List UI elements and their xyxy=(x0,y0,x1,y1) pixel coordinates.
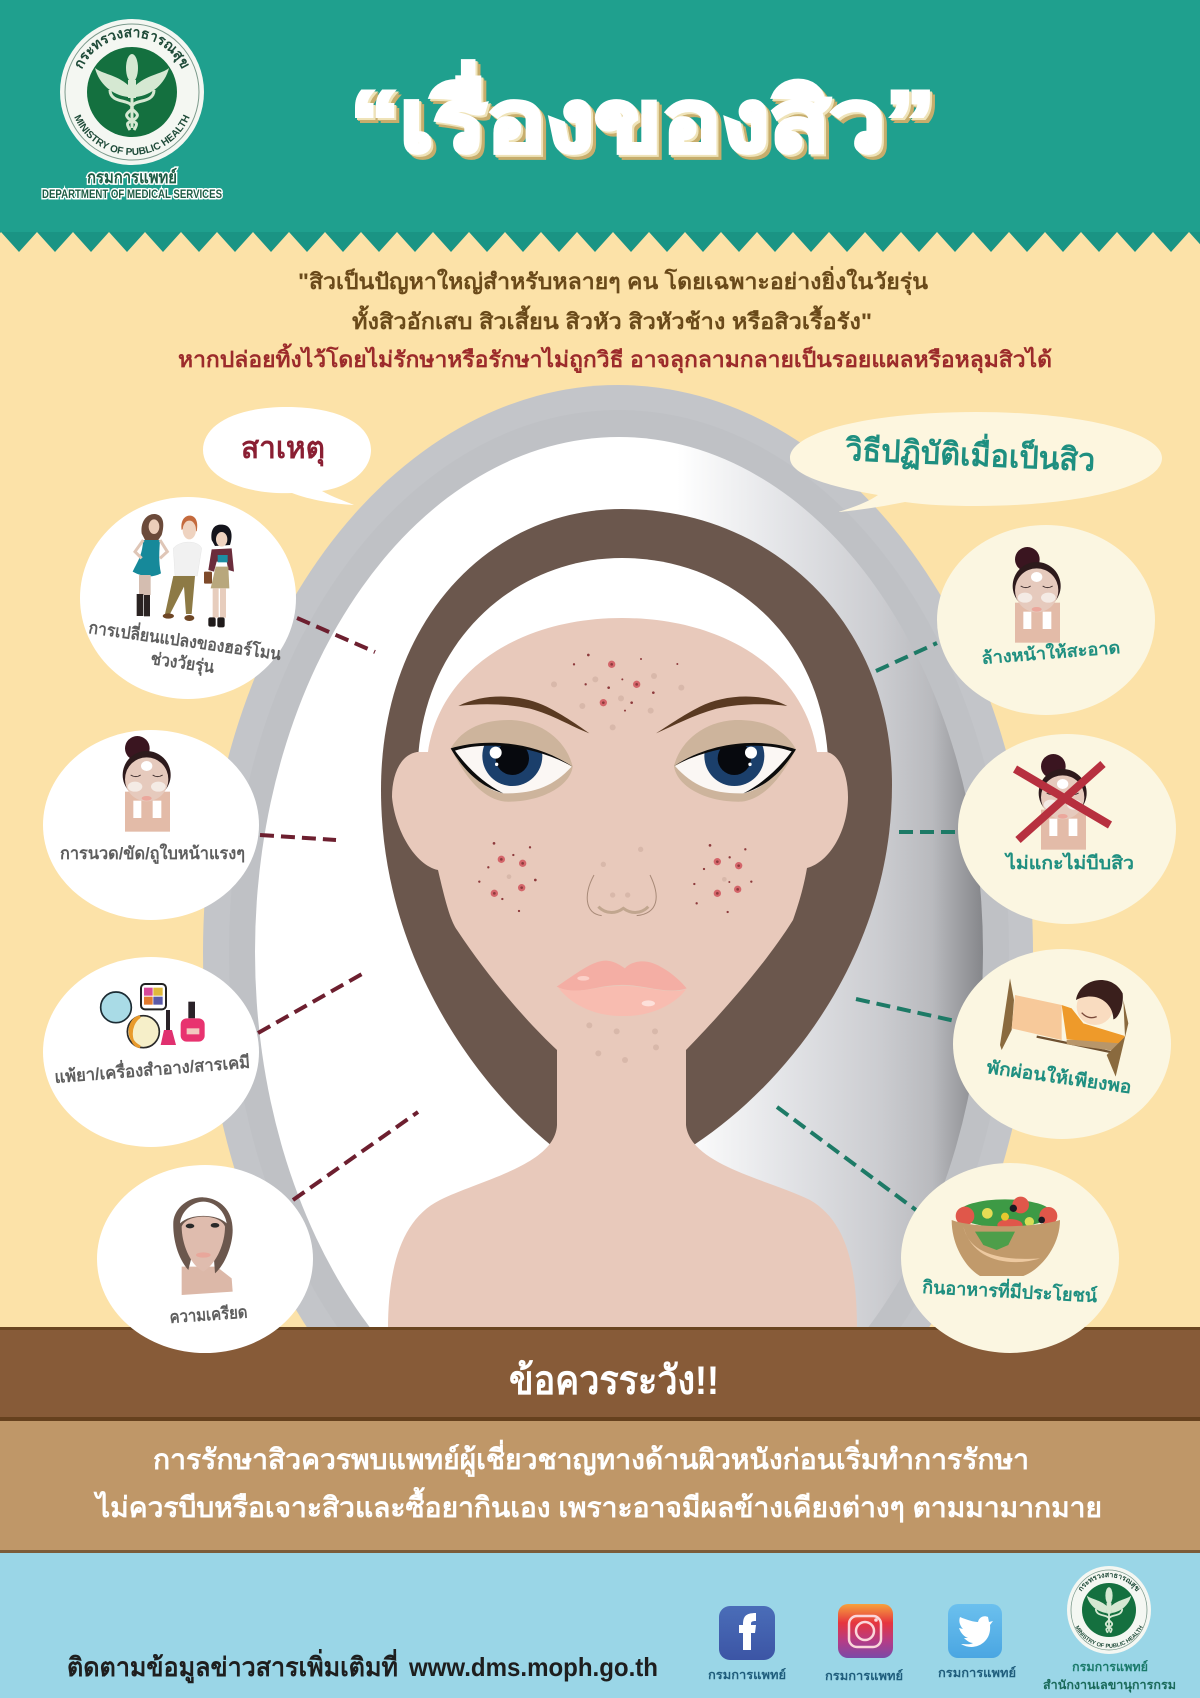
circle: wash face clean xyxy=(937,525,1155,715)
icon: stressed woman xyxy=(173,1197,233,1295)
logo: Ministry of Public Health: MINISTRY OF PUBLIC HEALTH xyxy=(74,114,190,155)
icon: person sleeping in bed xyxy=(1000,978,1128,1077)
footer logo: กระทรวงสาธารณสุข xyxy=(1079,1572,1140,1592)
warning heading band: ข้อควรระวัง!! xyxy=(509,1359,719,1403)
footer website text: ติดตามข้อมูลข่าวสารเพิ่มเติมที่ xyxy=(67,1648,398,1684)
right eyebrow xyxy=(656,697,787,733)
icon: instagram xyxy=(825,1604,903,1683)
icon: facebook xyxy=(708,1606,786,1682)
warning text panel: การรักษาสิวควรพบแพทย์ผู้เชี่ยวชาญทางด้านผิวหนังก่อนเริ่มทำการรักษา xyxy=(153,1439,1029,1477)
footer logo: MINISTRY OF PUBLIC HEALTH xyxy=(1075,1625,1143,1648)
warning text panel xyxy=(0,1421,1200,1553)
circle: rubbing the face hard xyxy=(43,730,259,920)
dashed connectors: causes xyxy=(258,618,418,1200)
lips xyxy=(557,961,687,1016)
nose xyxy=(587,875,656,916)
circle: stress xyxy=(97,1165,313,1353)
title: “เรื่องของสิว” xyxy=(350,60,935,170)
shoulders and neck xyxy=(388,1040,857,1330)
speech bubble: causes: สาเหตุ xyxy=(241,432,325,467)
intro text: ทั้งสิวอักเสบ สิวเสี้ยน สิวหัว สิวหัวช้าง หรือสิวเรื้อรัง" xyxy=(352,305,872,334)
portrait: woman with acne xyxy=(381,509,892,1330)
footer logo: สำนักงานเลขานุการกรม xyxy=(1043,1678,1176,1693)
circle: eat healthy food: กินอาหารที่มีประโยชน์ xyxy=(922,1274,1098,1306)
face xyxy=(392,618,848,1050)
speech bubble: causes xyxy=(203,407,371,505)
left eye xyxy=(451,720,573,802)
icon: salad bowl xyxy=(952,1197,1060,1276)
footer website text: www.dms.moph.go.th xyxy=(408,1652,658,1682)
circle: wash face clean: ล้างหน้าให้สะอาด xyxy=(981,637,1121,668)
intro text: หากปล่อยทิ้งไว้โดยไม่รักษาหรือรักษาไม่ถูกวิธี อาจลุกลามกลายเป็นรอยแผลหรือหลุมสิวได้ xyxy=(178,343,1052,374)
circle: hormone changes in teens xyxy=(80,497,296,699)
icon: woman with face mask xyxy=(123,736,171,832)
circle: allergies to drugs, cosmetics, chemicals xyxy=(43,957,259,1147)
footer logo xyxy=(1043,1566,1176,1693)
icon: twitter xyxy=(938,1604,1016,1680)
icon: twitter: กรมการแพทย์ xyxy=(938,1666,1016,1680)
circle: get enough rest: พักผ่อนให้เพียงพอ xyxy=(985,1056,1133,1097)
circle: do not pick or squeeze: ไม่แกะไม่บีบสิว xyxy=(1004,852,1134,873)
footer logo: กรมการแพทย์ xyxy=(1072,1660,1148,1674)
acne spots xyxy=(478,654,752,1063)
warning heading band xyxy=(0,1327,1200,1421)
intro text xyxy=(178,265,1052,374)
circle: hormone changes in teens: ช่วงวัยรุ่น xyxy=(149,649,216,678)
icon: woman with clean face xyxy=(1013,547,1061,643)
circle: hormone changes in teens: การเปลี่ยนแปลงของฮอร์โมน xyxy=(87,615,283,664)
circle: allergies to drugs, cosmetics, chemicals: แพ้ยา/เครื่องสำอาง/สารเคมี xyxy=(54,1050,251,1087)
left eyebrow xyxy=(458,697,589,733)
icon: face crossed out xyxy=(1015,754,1110,850)
logo: Ministry of Public Health: กระทรวงสาธารณสุข xyxy=(76,28,189,69)
headband xyxy=(418,558,828,790)
mirror xyxy=(203,385,1033,1519)
icon: instagram: กรมการแพทย์ xyxy=(825,1669,903,1683)
logo: Ministry of Public Health: กรมการแพทย์ xyxy=(87,167,177,187)
circle: eat healthy food xyxy=(901,1163,1119,1353)
circle: get enough rest xyxy=(953,949,1171,1139)
logo: Ministry of Public Health: DEPARTMENT OF MEDICAL SERVICES xyxy=(42,189,222,201)
circle: do not pick or squeeze xyxy=(958,734,1176,924)
circle: rubbing the face hard: การนวด/ขัด/ถูใบหน้าแรงๆ xyxy=(60,843,245,865)
footer band xyxy=(0,1553,1200,1698)
intro text: "สิวเป็นปัญหาใหญ่สำหรับหลายๆ คน โดยเฉพาะอย่างยิ่งในวัยรุ่น xyxy=(298,265,928,296)
speech bubble: what to do xyxy=(790,412,1162,512)
logo: Ministry of Public Health xyxy=(41,19,223,201)
footer website text xyxy=(67,1648,658,1684)
icon: facebook: กรมการแพทย์ xyxy=(708,1668,786,1682)
circle: stress: ความเครียด xyxy=(169,1302,248,1327)
icon: three teenagers xyxy=(133,514,234,627)
icon: cosmetics xyxy=(101,984,205,1048)
right eye xyxy=(674,720,796,802)
header banner xyxy=(0,0,1200,253)
speech bubble: what to do: วิธีปฏิบัติเมื่อเป็นสิว xyxy=(844,427,1096,478)
dashed connectors: actions xyxy=(777,643,958,1210)
warning text panel: ไม่ควรบีบหรือเจาะสิวและซื้อยากินเอง เพราะอาจมีผลข้างเคียงต่างๆ ตามมามากมาย xyxy=(93,1486,1102,1523)
hair xyxy=(381,509,892,1150)
